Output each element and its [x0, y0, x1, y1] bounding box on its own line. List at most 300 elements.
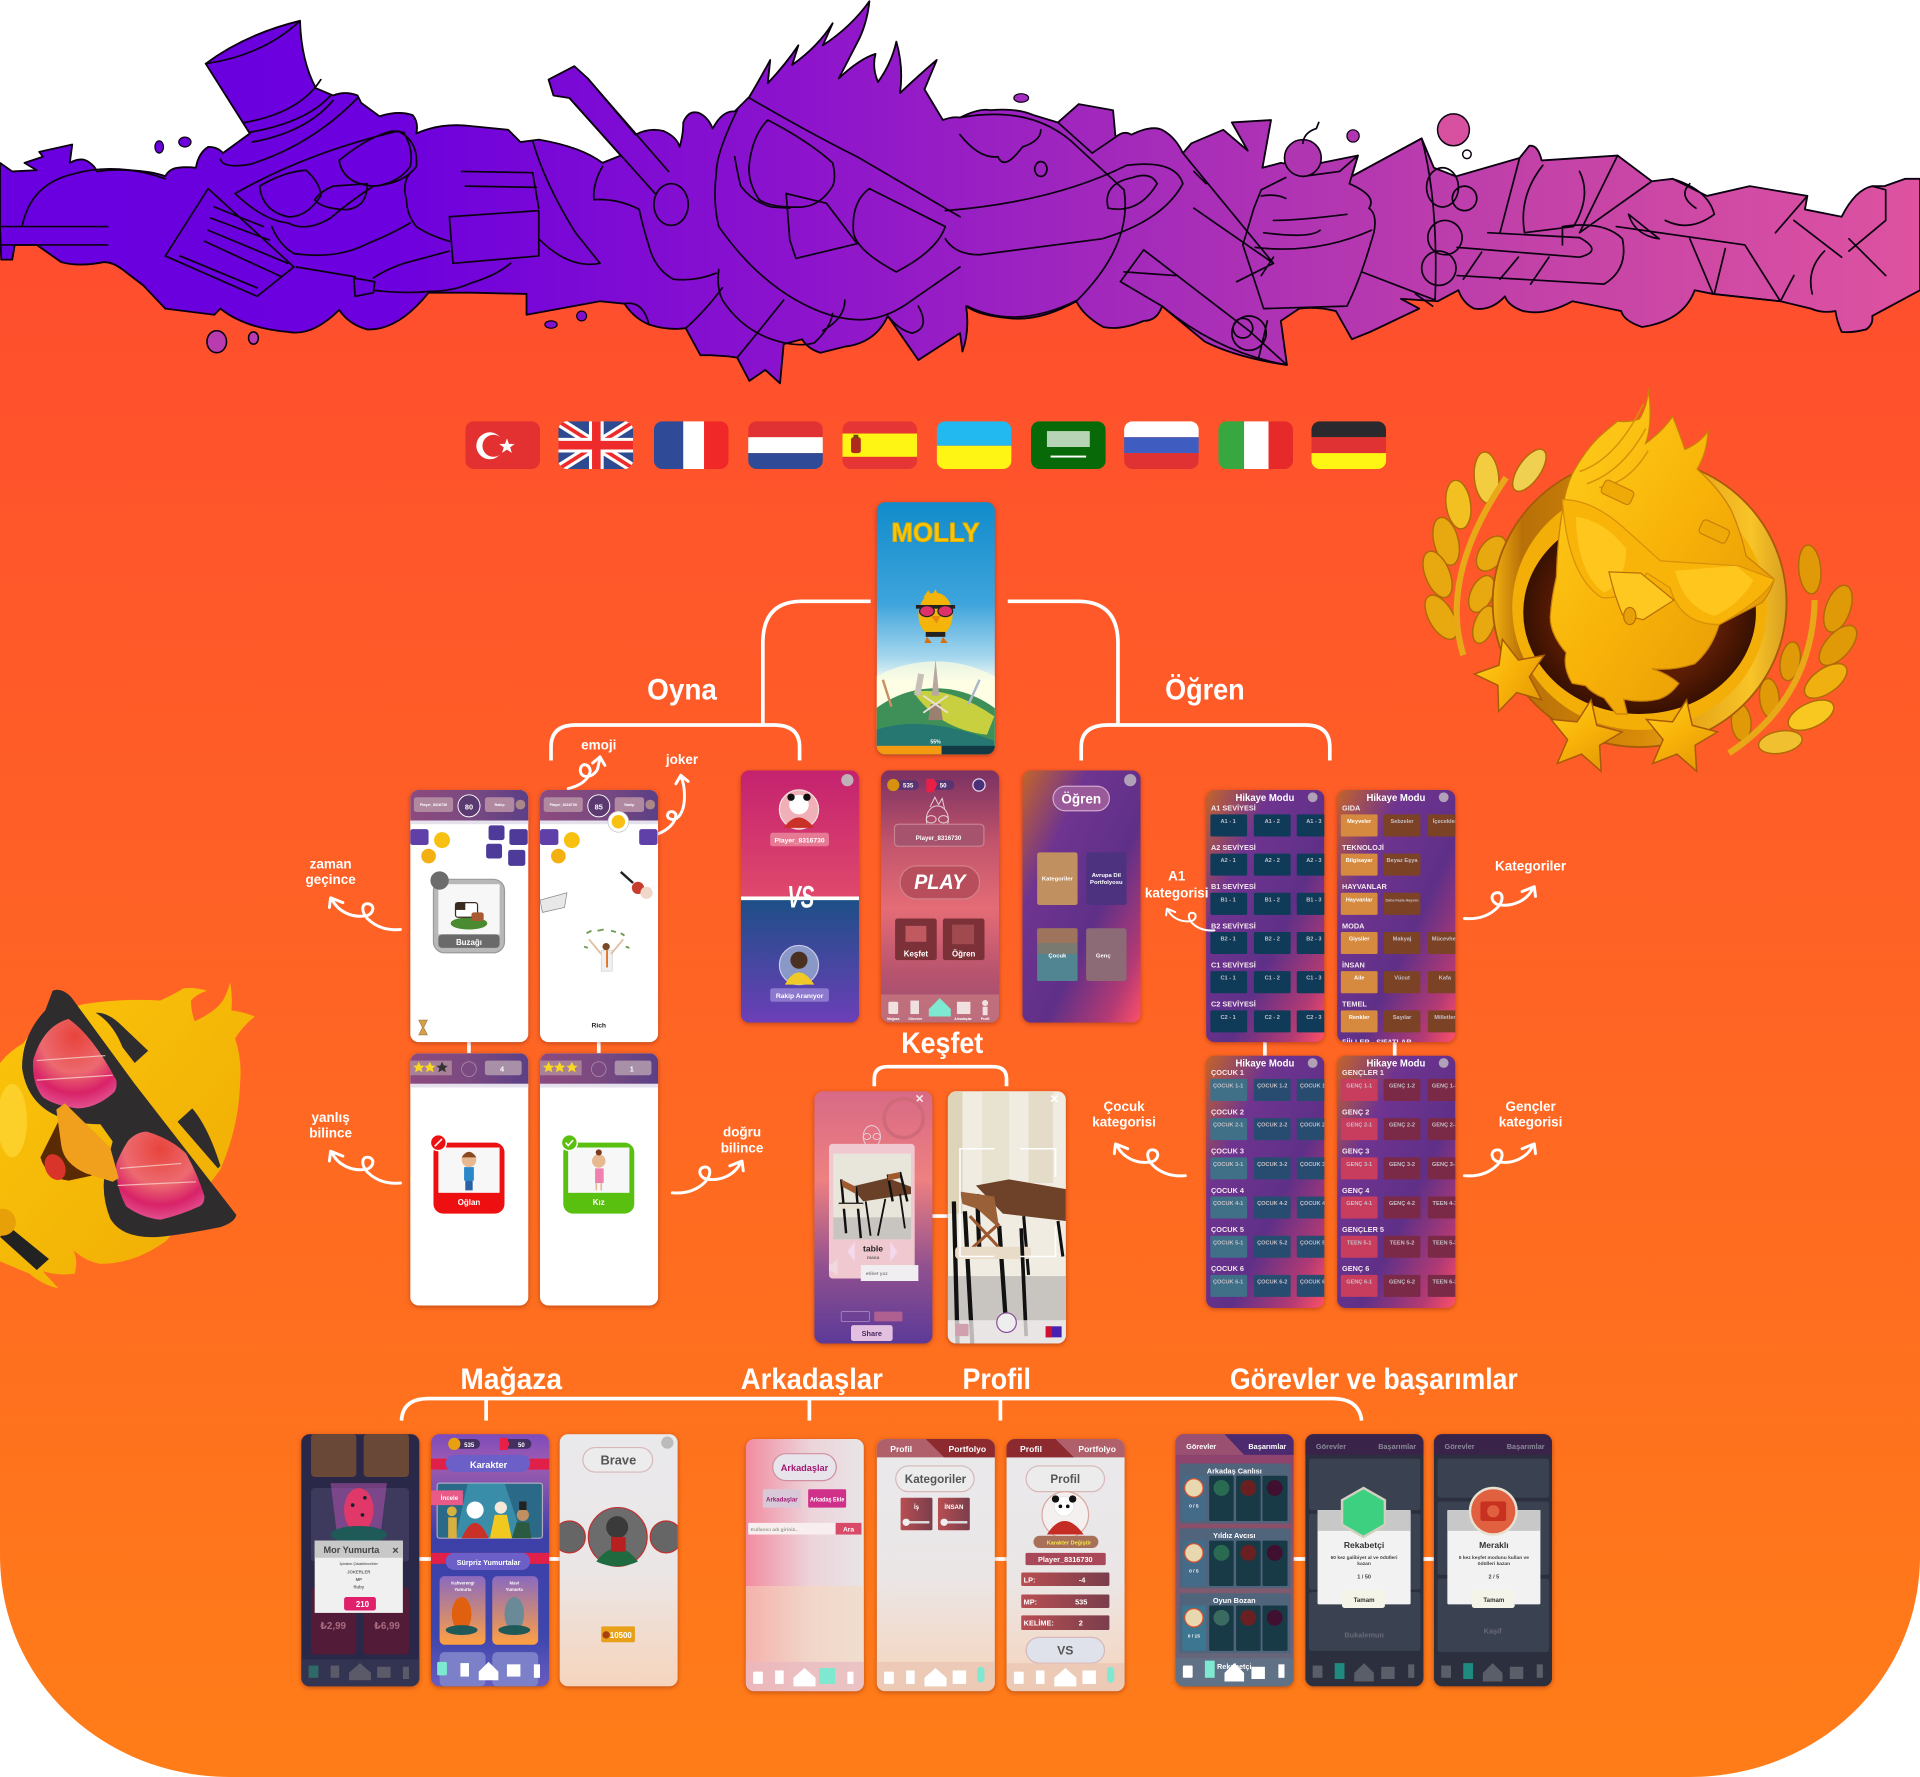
currency bar [887, 779, 985, 792]
phone: story mode child levels [1206, 1056, 1333, 1308]
heading: Arkadaşlar: Arkadaşlar [741, 1363, 883, 1396]
close button [1308, 1058, 1318, 1068]
child level rows: ÇOCUK 5 [1211, 1225, 1244, 1234]
player plate [894, 824, 984, 846]
teen level rows: TEEN 6-3 [1433, 1279, 1457, 1285]
screen title: Hikaye Modu [1367, 1059, 1425, 1070]
child level rows: ÇOCUK 6 [1211, 1264, 1244, 1273]
name pill: Brave [601, 1453, 636, 1468]
wooden table [976, 1179, 1066, 1275]
close button [1439, 792, 1449, 802]
result header: 1 [630, 1065, 634, 1074]
phone: joker usage screen [540, 790, 658, 1042]
megaphone, candy cane and scroll [1352, 138, 1886, 306]
category rows: TEMEL [1342, 1000, 1367, 1009]
annotation: Gençler kategorisi: Gençler [1506, 1099, 1556, 1114]
price tag [601, 1626, 635, 1642]
category rows: Milletler [1434, 1015, 1456, 1021]
egg detail modal: × [392, 1545, 399, 1557]
phone: character detail Brave [553, 1434, 682, 1686]
camera watermark [884, 1099, 923, 1138]
annotation: Çocuk kategorisi [1092, 1099, 1185, 1176]
tabs: Başarımlar [1248, 1442, 1286, 1451]
level rows: A2 - 2 [1265, 858, 1280, 864]
teen level rows: GENÇLER 1 [1342, 1068, 1384, 1077]
word card [430, 871, 504, 953]
phone: profile categories [877, 1439, 995, 1691]
achievement popup card: kazan [1357, 1561, 1371, 1567]
black chairs [954, 1192, 1031, 1343]
VS pill [1026, 1637, 1104, 1663]
level rows: A1 SEVİYESİ [1211, 804, 1256, 813]
annotation: Gençler kategorisi [1464, 1099, 1562, 1176]
child level rows: ÇOCUK 3-2 [1257, 1162, 1287, 1168]
photo of dining table [833, 1154, 911, 1239]
level rows: B2 - 1 [1220, 937, 1236, 943]
child level rows: ÇOCUK 3-3 [1300, 1162, 1330, 1168]
flag: Russia [1124, 421, 1199, 469]
emoji bubble [608, 811, 629, 832]
annotation: Çocuk kategorisi: Çocuk [1103, 1099, 1145, 1114]
stat: KELİME [1021, 1615, 1109, 1630]
egg card: Kahverengi [440, 1576, 486, 1645]
teen level rows: GENÇLER 5 [1342, 1225, 1384, 1234]
child level rows: ÇOCUK 4 [1211, 1186, 1245, 1195]
annotation: emoji: emoji [581, 737, 616, 752]
phone: story mode categories [1337, 790, 1464, 1047]
heading: Profil: Profil [962, 1363, 1031, 1396]
bottom navigation [877, 1662, 995, 1691]
screen title: Hikaye Modu [1367, 793, 1425, 804]
bottom navigation [881, 994, 999, 1023]
card: Çocuk: Çocuk [1048, 954, 1067, 960]
play button [900, 866, 980, 899]
level rows: B1 - 3 [1306, 897, 1322, 903]
child level rows: ÇOCUK 5-3 [1300, 1240, 1330, 1246]
phone: Molly start screen [874, 501, 998, 758]
game header: Player_8316730 [550, 803, 577, 807]
currency bar: 50 [940, 782, 947, 789]
category rows: Sayılar [1393, 1015, 1412, 1021]
category rows: Beyaz Eşya [1387, 858, 1418, 864]
character carousel [553, 1508, 682, 1566]
phone: wrong answer screen [410, 1053, 528, 1306]
word card: Buzağı [456, 938, 482, 947]
right laurel leaves [1730, 544, 1863, 757]
language flags row [465, 421, 1386, 469]
dim tabs and groups [1305, 1434, 1423, 1651]
phone: home menu [881, 770, 999, 1023]
teen level rows: TEEN 5-3 [1433, 1240, 1457, 1246]
answer image: rich man [584, 930, 629, 971]
stat: LP [1021, 1572, 1109, 1586]
dim tabs and groups: Başarımlar [1378, 1442, 1416, 1451]
emoji reactions [421, 832, 450, 863]
level rows: C1 - 3 [1306, 976, 1322, 982]
store badges [841, 1312, 902, 1321]
flag: Netherlands [748, 421, 823, 469]
band ink details [0, 21, 960, 358]
search box [748, 1523, 861, 1535]
Öğren button: Öğren [952, 949, 976, 958]
surprise eggs ribbon and pill [431, 1553, 549, 1570]
child level rows: ÇOCUK 2-3 [1300, 1123, 1330, 1129]
achievement popup card: 5 kez keşfet modunu kullan ve [1459, 1555, 1529, 1561]
flag: Saudi Arabia [1031, 421, 1106, 469]
word navigation: masa [867, 1256, 880, 1261]
annotation: emoji [568, 737, 616, 789]
level rows: A1 - 1 [1220, 819, 1236, 825]
title pill [896, 1466, 974, 1492]
tabs: Görevler [1186, 1442, 1216, 1451]
flag: Italy [1218, 421, 1293, 469]
bottom navigation [1176, 1658, 1294, 1686]
hourglass [419, 1020, 427, 1035]
game header: Rakip [624, 803, 635, 807]
chick body in gold [1550, 388, 1774, 714]
stat: KELİME: KELİME: [1024, 1619, 1054, 1628]
category rows: Bilgisayar [1346, 858, 1373, 864]
egg card: Mavi: Mavi [510, 1581, 519, 1586]
child level rows: ÇOCUK 1-3 [1300, 1084, 1330, 1090]
level rows: C2 - 1 [1220, 1015, 1236, 1021]
horizontal connectors between bottom screens [418, 1558, 1434, 1561]
achievement popup card: 50 kez galibiyet al ve ödülleri [1331, 1555, 1398, 1561]
achievement popup card [1318, 1510, 1411, 1608]
annotation: doğru bilince [672, 1124, 764, 1193]
flame hair strands [1580, 404, 1648, 487]
tab: Arkadaş Ekle: Arkadaş Ekle [810, 1496, 845, 1503]
stat: KELİME: 2 [1079, 1619, 1083, 1628]
change character button: Karakter Değiştir [1047, 1540, 1092, 1546]
screen title: Hikaye Modu [1236, 1059, 1294, 1070]
teen level rows: TEEN 5-1 [1347, 1240, 1372, 1246]
flag: Turkey [465, 421, 540, 469]
big planet [945, 114, 1183, 317]
chat and joker buttons [540, 829, 658, 845]
phone: character store [431, 1434, 549, 1686]
result card [829, 1144, 915, 1279]
word navigation: table [863, 1244, 883, 1254]
bottom navigation: Arkadaşlar [954, 1017, 973, 1021]
phone: store egg detail [301, 1434, 419, 1686]
annotation: A1 kategorisi: kategorisi [1145, 886, 1209, 901]
teen level rows: GENÇ 3-1 [1346, 1162, 1372, 1168]
player name plate [1026, 1553, 1106, 1565]
connector between story mode rows [1265, 1042, 1395, 1056]
level rows: B1 SEVİYESİ [1211, 882, 1256, 891]
child level rows: ÇOCUK 4-1 [1213, 1201, 1243, 1207]
green answer card: Kız [593, 1198, 605, 1207]
inner ring highlight [1512, 485, 1767, 730]
teen level rows: GENÇ 3 [1342, 1147, 1369, 1156]
sunglasses right lens [116, 1132, 204, 1220]
achievement popup card: Tamam [1354, 1597, 1375, 1604]
opponent avatar [779, 945, 819, 985]
flag: France [654, 421, 729, 469]
annotation: zaman geçince: zaman [310, 856, 352, 871]
progress bar: 55% [930, 739, 941, 745]
dim tabs and groups: Görevler [1445, 1442, 1475, 1451]
answer image: music notes [540, 893, 567, 912]
child level rows: ÇOCUK 5-1 [1213, 1240, 1243, 1246]
lens highlights [37, 1056, 196, 1185]
annotation: joker: joker [665, 752, 699, 767]
close mark: × [915, 1091, 924, 1107]
bottom navigation [1007, 1663, 1125, 1691]
achievement popup card: 2 / 5 [1489, 1575, 1499, 1581]
chick outline logo [926, 796, 949, 824]
logo text: MOLLY [891, 517, 980, 547]
character banner [431, 1483, 542, 1538]
beak [56, 1103, 119, 1182]
teen level rows: GENÇ 1-3 [1432, 1084, 1458, 1090]
dim tabs and groups: Bukalemun [1344, 1630, 1384, 1639]
dim navigation [301, 1659, 419, 1686]
achievement popup card: Tamam [1483, 1597, 1505, 1604]
child level rows: ÇOCUK 1-2 [1257, 1084, 1287, 1090]
category rows: Vücut [1394, 976, 1410, 982]
heading: Öğren: Öğren [1165, 673, 1245, 706]
connector between game rows [469, 1041, 599, 1053]
dim tabs and groups [1434, 1434, 1552, 1652]
annotation: zaman geçince: geçince [306, 872, 356, 887]
level rows: A1 - 2 [1265, 819, 1280, 825]
title pill [773, 1454, 836, 1481]
egg detail modal [315, 1541, 403, 1613]
child level rows: ÇOCUK 2-1 [1213, 1123, 1243, 1129]
category rows: Makyaj [1393, 937, 1412, 943]
green answer card [561, 1135, 634, 1214]
close mark: × [1050, 1091, 1059, 1107]
teen level rows: GENÇ 4-1 [1346, 1201, 1372, 1207]
annotation: yanlış bilince [309, 1110, 400, 1183]
player plate: Player_8316730 [916, 835, 962, 842]
gold ring [1493, 458, 1787, 747]
child level rows: ÇOCUK 5-2 [1257, 1240, 1287, 1246]
result header [540, 1053, 658, 1088]
bottom navigation: Görevler [908, 1017, 923, 1021]
Karakter ribbon and pill: Karakter [470, 1460, 508, 1470]
task group: Oyun Bozan: Oyun Bozan [1213, 1596, 1256, 1605]
egg detail modal: JOKERLER [347, 1570, 370, 1575]
phone: profile [1007, 1439, 1125, 1691]
game header [540, 790, 658, 824]
band silhouette [0, 1, 1920, 383]
level rows: C2 SEVİYESİ [1211, 1000, 1256, 1009]
prices [320, 1621, 400, 1632]
stat: LP: -4 [1079, 1575, 1086, 1584]
category rows: Hayvanlar [1346, 897, 1373, 903]
player name plate: Player_8316730 [1038, 1555, 1093, 1564]
game header: 80 [465, 803, 473, 812]
Share button: Share [862, 1329, 882, 1338]
level rows: A2 - 3 [1306, 858, 1322, 864]
teen level rows: GENÇ 3-3 [1432, 1162, 1458, 1168]
card: Avrupa Dil Portfolyosu [1086, 852, 1127, 905]
phone: Öğren menu [1022, 770, 1141, 1023]
egg card: Mavi: Yumurta [506, 1587, 523, 1592]
level rows: B1 - 1 [1220, 897, 1236, 903]
card: Kategoriler: Kategoriler [1042, 877, 1074, 883]
sunglasses left lens [33, 1019, 117, 1108]
teen level rows: GENÇ 1-1 [1346, 1084, 1372, 1090]
bottom camera bar [948, 1313, 1066, 1343]
card: Avrupa Dil Portfolyosu: Portfolyosu [1090, 880, 1123, 886]
currency bar [448, 1438, 531, 1450]
game header: Rakip [495, 803, 505, 807]
achievement popup card: Rekabetçi [1344, 1540, 1384, 1550]
egg card: Kahverengi: Kahverengi [451, 1581, 474, 1586]
annotation: A1 kategorisi: A1 [1168, 869, 1186, 884]
speaker icon [829, 1259, 838, 1276]
category rows: Giysiler [1349, 937, 1370, 943]
task group: Oyun Bozan: 0 / 15 [1188, 1633, 1200, 1639]
chick outline [863, 1125, 880, 1148]
collar and coin [0, 1209, 49, 1270]
answer word: Rich [591, 1022, 606, 1030]
task group: Arkadaş Canlısı [1179, 1463, 1291, 1523]
change character button [1033, 1536, 1098, 1548]
dim store cards [311, 1434, 409, 1655]
stat: MP: MP: [1024, 1597, 1037, 1606]
bottom navigation [746, 1662, 864, 1691]
mouth [40, 1121, 92, 1181]
currency bar: 50 [518, 1442, 525, 1449]
child level rows: ÇOCUK 6-3 [1300, 1279, 1330, 1285]
tabs [1176, 1434, 1294, 1455]
level rows: B2 - 2 [1265, 937, 1280, 943]
teen level rows: GENÇ 3-2 [1389, 1162, 1415, 1168]
play button: PLAY [914, 871, 968, 894]
category rows: TEKNOLOJİ [1342, 843, 1384, 852]
phone: tasks and achievements [1176, 1434, 1294, 1686]
screen title: Hikaye Modu [1236, 793, 1294, 804]
gold medal chick [1417, 388, 1863, 774]
phone: VS matchmaking [741, 770, 859, 1023]
glasses arm right [178, 1108, 220, 1168]
category rows: İçecekler [1433, 818, 1458, 825]
connector lines from start screen to Oyna and Öğren [551, 601, 1330, 761]
teen level rows: GENÇ 2-3 [1432, 1123, 1458, 1129]
card: Avrupa Dil Portfolyosu: Avrupa Dil [1092, 873, 1121, 879]
tab: Arkadaşlar: Arkadaşlar [766, 1496, 798, 1503]
answer image: knife and food [621, 872, 653, 899]
Keşfet button: Keşfet [904, 949, 928, 958]
card: Çocuk [1037, 928, 1078, 981]
emoji reactions [551, 832, 580, 863]
tile: İnsan: İNSAN [944, 1504, 963, 1511]
dim tabs and groups: Görevler [1316, 1442, 1346, 1451]
yellow chick mascot with sunglasses [0, 982, 255, 1288]
teen level rows: GENÇ 4 [1342, 1186, 1370, 1195]
gold stars [1468, 630, 1722, 774]
annotation: Gençler kategorisi: kategorisi [1499, 1115, 1562, 1130]
red answer card: Oğlan [458, 1198, 480, 1207]
prices: ₺6,99 [374, 1621, 400, 1632]
bottom navigation: Rekabetçi [1217, 1662, 1252, 1671]
currency bar: 535 [464, 1442, 475, 1449]
phone: achievement popup Rekabetçi [1305, 1434, 1423, 1686]
game header: Player_8316730 [420, 803, 447, 807]
annotation: yanlış bilince: yanlış [312, 1110, 350, 1125]
heading: Mağaza: Mağaza [460, 1363, 563, 1396]
result header [410, 1053, 528, 1088]
teen level rows: GENÇ 1-2 [1389, 1084, 1415, 1090]
VS pill: VS [1057, 1644, 1073, 1658]
opponent searching label: Rakip Aranıyor [776, 993, 824, 1000]
Profil and Portfolyo tabs: Profil [890, 1444, 912, 1454]
chat button [410, 829, 429, 845]
annotation: Kategoriler: Kategoriler [1495, 859, 1567, 874]
game header [410, 790, 528, 824]
egg on cushion [331, 1483, 387, 1543]
teen level rows [1341, 1068, 1464, 1297]
joker buttons [486, 825, 528, 866]
annotation: Çocuk kategorisi: kategorisi [1092, 1115, 1156, 1130]
level rows: A2 SEVİYESİ [1211, 843, 1256, 852]
Öğren button [943, 919, 984, 960]
level rows: A2 - 1 [1220, 858, 1236, 864]
tab: Arkadaş Ekle [808, 1489, 846, 1508]
player name [770, 833, 829, 846]
globe with landmarks [876, 660, 995, 754]
Karakter ribbon and pill [431, 1455, 549, 1472]
level rows: C2 - 2 [1265, 1015, 1280, 1021]
teen level rows: GENÇ 4-2 [1389, 1201, 1415, 1207]
card: Genç: Genç [1096, 954, 1111, 960]
annotation: zaman geçince [306, 856, 400, 930]
child level rows: ÇOCUK 4-2 [1257, 1201, 1287, 1207]
category rows: GIDA [1342, 804, 1361, 813]
Share button [851, 1325, 893, 1341]
phone: Keşfet word result [814, 1091, 932, 1343]
opponent searching label [770, 988, 829, 1002]
level rows: B2 - 3 [1306, 937, 1322, 943]
achievement popup card: Meraklı [1479, 1540, 1509, 1550]
camera badge [1470, 1488, 1517, 1535]
tile: İnsan [938, 1498, 970, 1530]
prices: ₺2,99 [320, 1621, 347, 1632]
left laurel leaves [1417, 444, 1552, 646]
task group: Yıldız Avcısı: 0 / 5 [1189, 1568, 1199, 1574]
player avatar [779, 790, 819, 829]
title pill: Arkadaşlar [781, 1463, 829, 1473]
bottom navigation: Mağaza [887, 1017, 900, 1021]
close button [841, 774, 853, 786]
level rows: C1 - 2 [1265, 976, 1280, 982]
child level rows: ÇOCUK 4-3 [1300, 1201, 1330, 1207]
teen level rows: GENÇ 6 [1342, 1264, 1369, 1273]
purple doodle band [0, 1, 1920, 383]
surprise eggs ribbon and pill: Sürpriz Yumurtalar [457, 1558, 521, 1567]
chick body [0, 982, 255, 1288]
search box: Kullanıcı adı giriniz.. [751, 1527, 798, 1533]
result header: 4 [500, 1065, 505, 1074]
dim navigation [1441, 1663, 1543, 1681]
category rows: İNSAN [1342, 960, 1365, 969]
dark ring interior [1523, 511, 1756, 714]
category rows: Mücevher [1432, 937, 1459, 943]
Öğren pill [1053, 786, 1109, 811]
task group: Yıldız Avcısı [1179, 1528, 1291, 1588]
note box [861, 1265, 918, 1281]
heading: Oyna: Oyna [647, 673, 718, 706]
flag: Ukraine [937, 421, 1011, 469]
rocket [1120, 153, 1287, 365]
category rows: Sebzeler [1390, 819, 1414, 825]
bottom navigation: Profil [981, 1017, 990, 1021]
